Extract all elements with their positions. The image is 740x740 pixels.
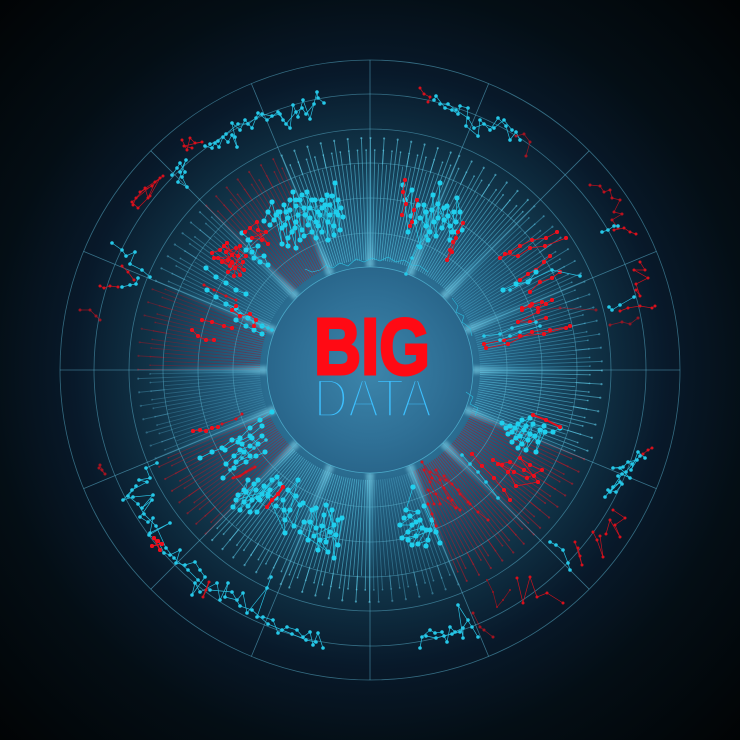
scatter cluster: top left cyan [242, 183, 343, 265]
outer series: far left red [99, 465, 105, 474]
central disc [267, 267, 473, 473]
light beams along spokes [150, 150, 590, 590]
scatter cluster: bottom left cyan [233, 467, 342, 558]
red sector bars: lower right second [410, 473, 534, 597]
outer series: bottom left red marks [152, 538, 209, 597]
outer series: upper left cyan [172, 160, 187, 187]
red sector bars: lower left [143, 410, 267, 534]
blue sector bars: upper right [370, 138, 459, 224]
blue sector bars: bottom left [281, 516, 370, 602]
outer series: top left red [182, 138, 202, 150]
outer series: upper left red [132, 176, 163, 208]
blue sector bars: upper right second [426, 156, 541, 269]
mixed sector bars: bottom right [344, 505, 459, 618]
data lines: right middle red and cyan [484, 302, 596, 348]
red sector bars: upper left [206, 143, 330, 267]
mixed sector bars: right [505, 281, 618, 396]
scatter cluster: top right cyan and red [402, 180, 463, 274]
data lines: left upper cyan and red [192, 268, 272, 340]
scatter cluster: lower left cyan [193, 412, 272, 478]
outer series: right red [609, 262, 655, 325]
data lines: right upper red and cyan [500, 232, 580, 308]
blue sector bars: right lower [516, 370, 602, 459]
outer series: top right [420, 88, 530, 156]
scatter cluster: lower right cyan [502, 415, 560, 452]
outer series: bottom right cyan [420, 605, 478, 648]
title: BIG: BIG [314, 302, 430, 391]
subtitle: DATA: DATA [314, 367, 432, 429]
scatter cluster: bottom centre cyan and red [400, 487, 440, 546]
mixed sector bars: left upper [156, 199, 269, 314]
blue sector bars: top left [281, 122, 396, 235]
scatter cluster: upper left red [212, 222, 268, 276]
outer series: left cyan and red [80, 243, 150, 320]
red sector bars: lower right [471, 426, 584, 541]
mixed sector bars: left lower [122, 344, 235, 459]
data lines: lower right red [422, 454, 542, 520]
outer series: right cyan [605, 452, 645, 497]
outer series: right red tip [643, 448, 652, 454]
radial bars: blue and red sectors [122, 122, 618, 618]
outer series: lower right cyan and red [550, 510, 625, 570]
inner jagged data ring [305, 257, 478, 416]
red sector bars: left [138, 281, 224, 370]
outer series: bottom left cyan [123, 463, 323, 648]
polar grid: spokes and rings [60, 60, 680, 680]
outer series: upper right red [590, 185, 636, 234]
outer series: bottom right red [473, 577, 563, 637]
outer series: top left cyan [205, 92, 324, 148]
mixed sector bars: right upper [473, 206, 597, 330]
blue sector bars: bottom left second [199, 471, 314, 584]
